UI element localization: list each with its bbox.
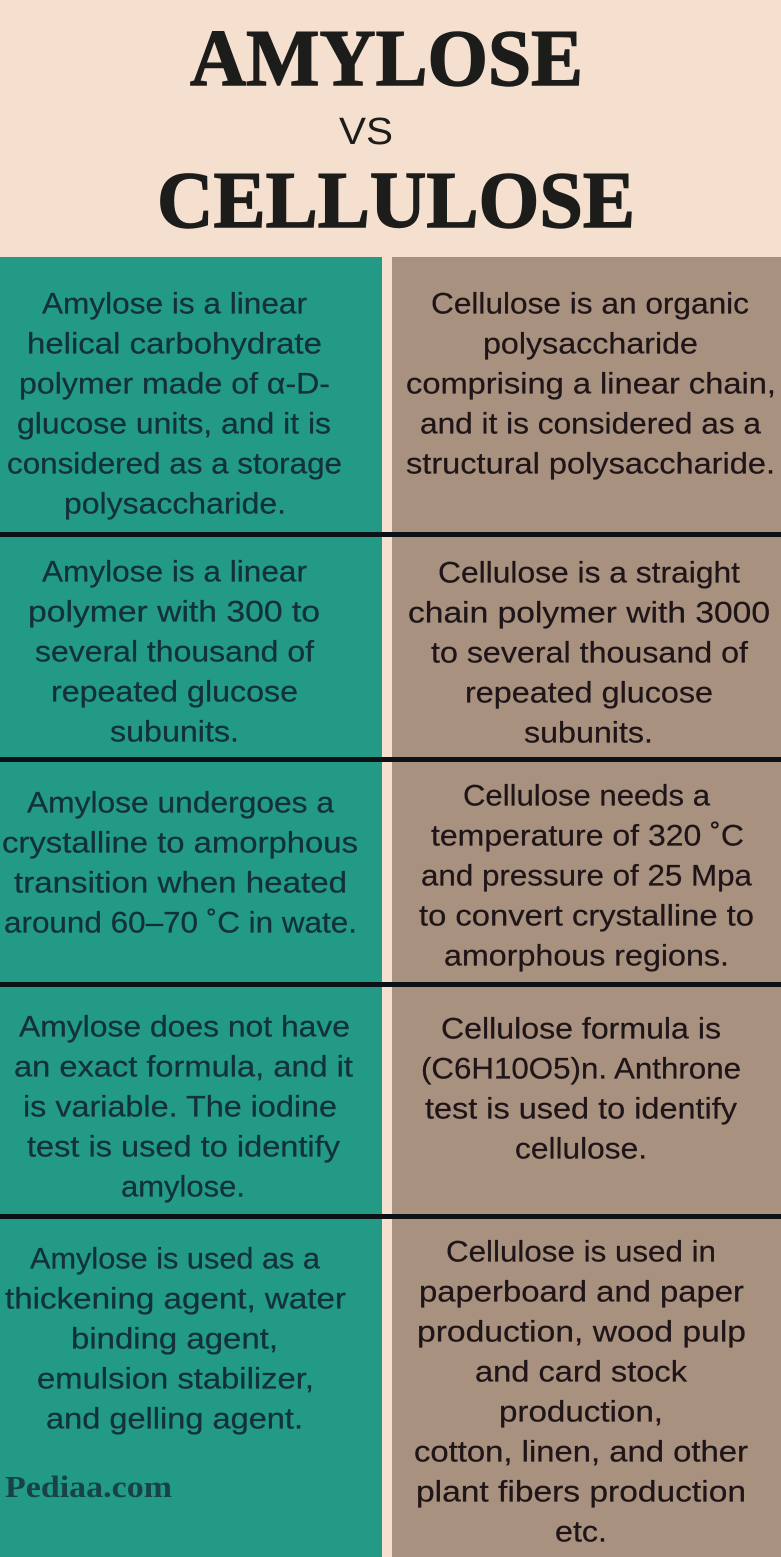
text block: row 5 amylose: and gelling agent. <box>46 1402 303 1436</box>
text block: row 5 amylose <box>5 1242 346 1436</box>
text block: row 4 amylose: Amylose does not have <box>19 1010 350 1044</box>
text block: row 2 amylose: several thousand of <box>35 636 315 668</box>
panel: row 4 cellulose <box>392 987 781 1214</box>
text block: row 2 amylose <box>28 556 320 748</box>
text block: row 2 amylose: repeated glucose <box>51 676 298 708</box>
text block: row 1 amylose: helical carbohydrate <box>27 328 322 360</box>
panel: row 5 amylose <box>0 1219 382 1557</box>
text block: row 3 cellulose: Cellulose needs a <box>463 780 710 812</box>
text block: row 3 cellulose <box>419 780 754 972</box>
text block: row 1 amylose: Amylose is a linear <box>42 288 307 320</box>
text block: row 4 cellulose: test is used to identify <box>425 1092 737 1126</box>
panel: row 1 cellulose <box>392 257 781 532</box>
text block: row 4 amylose <box>14 1010 354 1204</box>
text block: row 1 cellulose: comprising a linear chain, <box>406 368 776 400</box>
title <box>157 15 635 245</box>
text block: row 2 amylose: subunits. <box>110 716 239 748</box>
text block: row 5 cellulose: production, <box>499 1396 663 1428</box>
text block: row 3 amylose <box>2 786 358 940</box>
panel: row 3 cellulose <box>392 762 781 982</box>
text block: row 4 cellulose <box>421 1012 741 1166</box>
text block: row 2 cellulose: to several thousand of <box>431 636 749 670</box>
text block: row 2 cellulose: repeated glucose <box>465 676 713 710</box>
text: vs: VS <box>339 111 393 153</box>
text block: row 1 amylose: considered as a storage <box>7 448 342 480</box>
panel: row 4 amylose <box>0 987 382 1214</box>
text block: row 4 amylose: is variable. The iodine <box>23 1090 337 1124</box>
logo: Pediaa.com: Pediaa.com <box>5 1469 172 1504</box>
text block: row 1 amylose <box>7 288 342 520</box>
text block: row 3 amylose: crystalline to amorphous <box>2 826 358 860</box>
text block: row 3 cellulose: to convert crystalline to <box>419 900 754 932</box>
text block: row 5 amylose: thickening agent, water <box>5 1282 346 1316</box>
text block: row 1 cellulose: Cellulose is an organic <box>431 288 749 320</box>
text block: row 5 amylose: emulsion stabilizer, <box>37 1362 314 1396</box>
text block: row 5 cellulose: paperboard and paper <box>419 1276 744 1308</box>
text block: row 3 cellulose: temperature of 320 ˚C <box>431 820 744 852</box>
text block: row 5 amylose: binding agent, <box>71 1322 278 1356</box>
text block: row 5 cellulose: Cellulose is used in <box>446 1236 716 1268</box>
text block: row 1 amylose: glucose units, and it is <box>17 408 331 440</box>
panel: row 3 amylose <box>0 762 382 982</box>
panel: row 5 cellulose <box>392 1219 781 1557</box>
text block: row 5 cellulose: cotton, linen, and other <box>414 1436 748 1468</box>
text block: row 1 cellulose: structural polysaccharide. <box>406 448 775 480</box>
text block: row 5 cellulose: etc. <box>555 1516 607 1548</box>
text block: row 4 amylose: test is used to identify <box>27 1130 340 1164</box>
text block: row 4 cellulose: cellulose. <box>515 1132 647 1166</box>
text block: row 5 cellulose: production, wood pulp <box>417 1316 746 1348</box>
heading: amylose: AMYLOSE <box>190 15 583 103</box>
text block: row 2 amylose: polymer with 300 to <box>28 596 320 628</box>
text block: row 4 amylose: amylose. <box>121 1170 245 1204</box>
panel: row 2 amylose <box>0 537 382 757</box>
panel: row 1 amylose <box>0 257 382 532</box>
text block: row 1 cellulose: and it is considered as a <box>420 408 761 440</box>
text block: row 2 cellulose: chain polymer with 3000 <box>408 596 770 630</box>
text block: row 3 amylose: around 60–70 ˚C in wate. <box>4 906 357 940</box>
text block: row 2 amylose: Amylose is a linear <box>42 556 307 588</box>
text block: row 1 amylose: polymer made of α-D- <box>19 368 330 400</box>
text block: row 3 cellulose: amorphous regions. <box>444 940 729 972</box>
text block: row 3 amylose: Amylose undergoes a <box>27 786 334 820</box>
text block: row 5 cellulose: plant fibers production <box>416 1476 746 1508</box>
heading: cellulose: CELLULOSE <box>157 157 635 245</box>
text block: row 4 cellulose: Cellulose formula is <box>441 1012 721 1046</box>
text block: row 2 cellulose: Cellulose is a straight <box>438 556 741 590</box>
text block: row 5 cellulose <box>414 1236 748 1548</box>
text block: row 2 cellulose: subunits. <box>524 716 653 750</box>
text block: row 1 cellulose: polysaccharide <box>483 328 698 360</box>
text block: row 1 cellulose <box>406 288 776 480</box>
text block: row 2 cellulose <box>408 556 770 750</box>
text block: row 4 cellulose: (C6H10O5)n. Anthrone <box>421 1052 741 1086</box>
text block: row 3 cellulose: and pressure of 25 Mpa <box>421 860 752 892</box>
text block: row 5 cellulose: and card stock <box>475 1356 688 1388</box>
panel: row 2 cellulose <box>392 537 781 757</box>
text block: row 1 amylose: polysaccharide. <box>64 488 286 520</box>
text block: row 4 amylose: an exact formula, and it <box>14 1050 354 1084</box>
text block: row 3 amylose: transition when heated <box>14 866 347 900</box>
text block: row 5 amylose: Amylose is used as a <box>30 1242 320 1276</box>
